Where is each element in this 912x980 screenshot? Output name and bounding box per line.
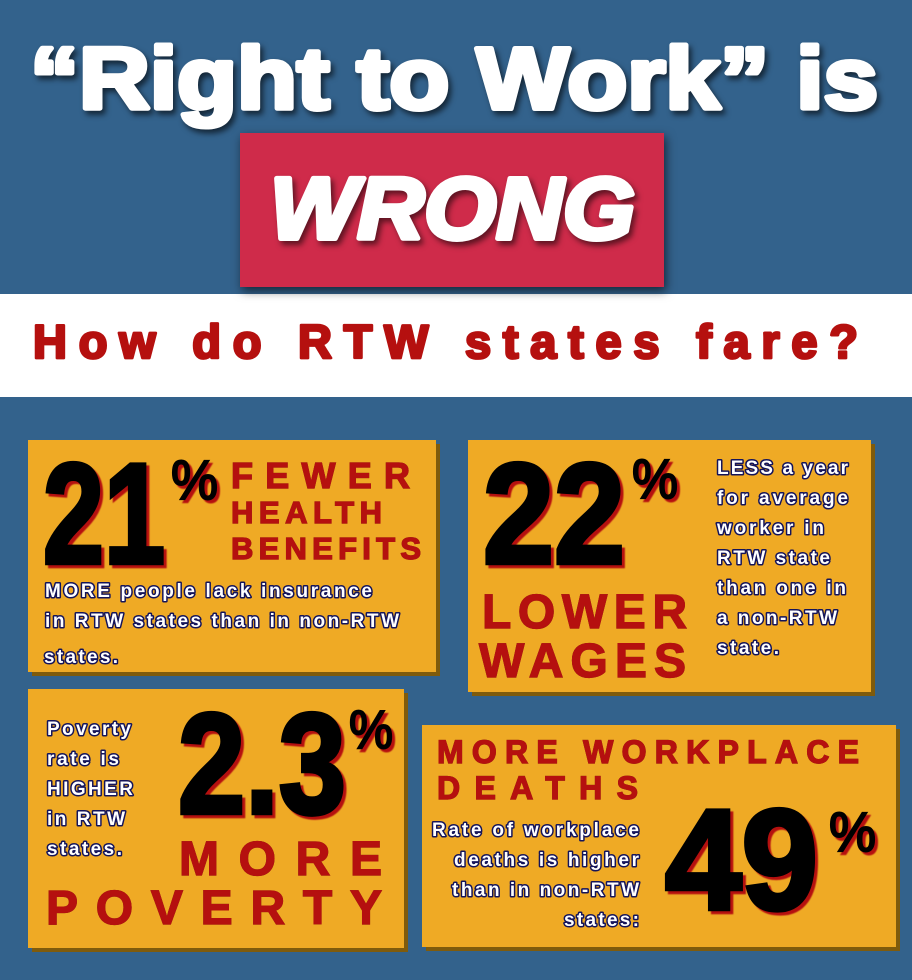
banner: WRONG (240, 133, 664, 287)
heading: fewer health benefits: HEALTH (231, 495, 382, 530)
text: insurance description: in RTW states than in non-RTW (45, 611, 399, 632)
stat: 21%: 21 (43, 435, 165, 594)
panel: workplace deaths (422, 725, 900, 951)
heading: more workplace deaths (437, 734, 859, 806)
text: poverty description: states. (47, 839, 122, 860)
text: poverty description: Poverty (47, 719, 131, 740)
heading: more workplace deaths: MORE WORKPLACE (437, 734, 859, 770)
text: insurance description: states. (44, 647, 118, 668)
text: deaths description: Rate of workplace (432, 820, 639, 841)
text: wages description: LESS a year (717, 458, 849, 479)
title: Right to Work is: “Right to Work” is (30, 30, 878, 128)
text: poverty description: rate is (47, 749, 119, 770)
heading: lower wages: LOWER (482, 586, 687, 639)
text: poverty description: in RTW (47, 809, 125, 830)
panel: more poverty (28, 685, 408, 952)
text: wages description: a non-RTW (717, 608, 837, 629)
text: poverty description (47, 719, 133, 860)
stat: 2.3%: 2.3 (178, 685, 346, 844)
subtitle: How do RTW states fare?: How do RTW states fare? (33, 315, 858, 368)
panel: health benefits (28, 435, 440, 676)
heading: more poverty (46, 833, 382, 935)
text: deaths description: states: (564, 910, 639, 931)
stat: 21%: % (171, 448, 218, 511)
text: deaths description (432, 820, 640, 931)
text: deaths description: deaths is higher (454, 850, 640, 871)
stat: 22%: 22 (483, 435, 625, 594)
text: wages description: for average (717, 488, 848, 509)
heading: fewer health benefits: FEWER (231, 455, 410, 496)
text: wages description: state. (717, 638, 779, 659)
text: wages description: than one in (717, 578, 846, 599)
stat: 2.3%: % (349, 700, 393, 760)
text: wages description (716, 458, 849, 659)
heading: fewer health benefits: BENEFITS (231, 531, 421, 566)
heading: fewer health benefits (231, 455, 421, 566)
text: deaths description: than in non-RTW (452, 880, 639, 901)
text: wages description: RTW state (717, 548, 830, 569)
heading: more poverty: MORE (179, 833, 382, 886)
stat: 49%: 49 (665, 781, 818, 940)
band: white subtitle strip (0, 294, 912, 397)
stat: 22%: % (632, 447, 678, 510)
text: wages description: worker in (716, 518, 824, 539)
banner: WRONG: WRONG (270, 160, 635, 258)
text: poverty description: HIGHER (47, 779, 133, 800)
heading: more poverty: POVERTY (46, 882, 382, 935)
stat: 49%: % (829, 800, 876, 863)
heading: lower wages: WAGES (479, 635, 686, 688)
panel: lower wages (468, 435, 875, 696)
text: insurance description: MORE people lack insurance (45, 581, 372, 602)
heading: lower wages (479, 586, 687, 688)
heading: more workplace deaths: DEATHS (437, 770, 638, 806)
text: insurance description (44, 581, 399, 668)
